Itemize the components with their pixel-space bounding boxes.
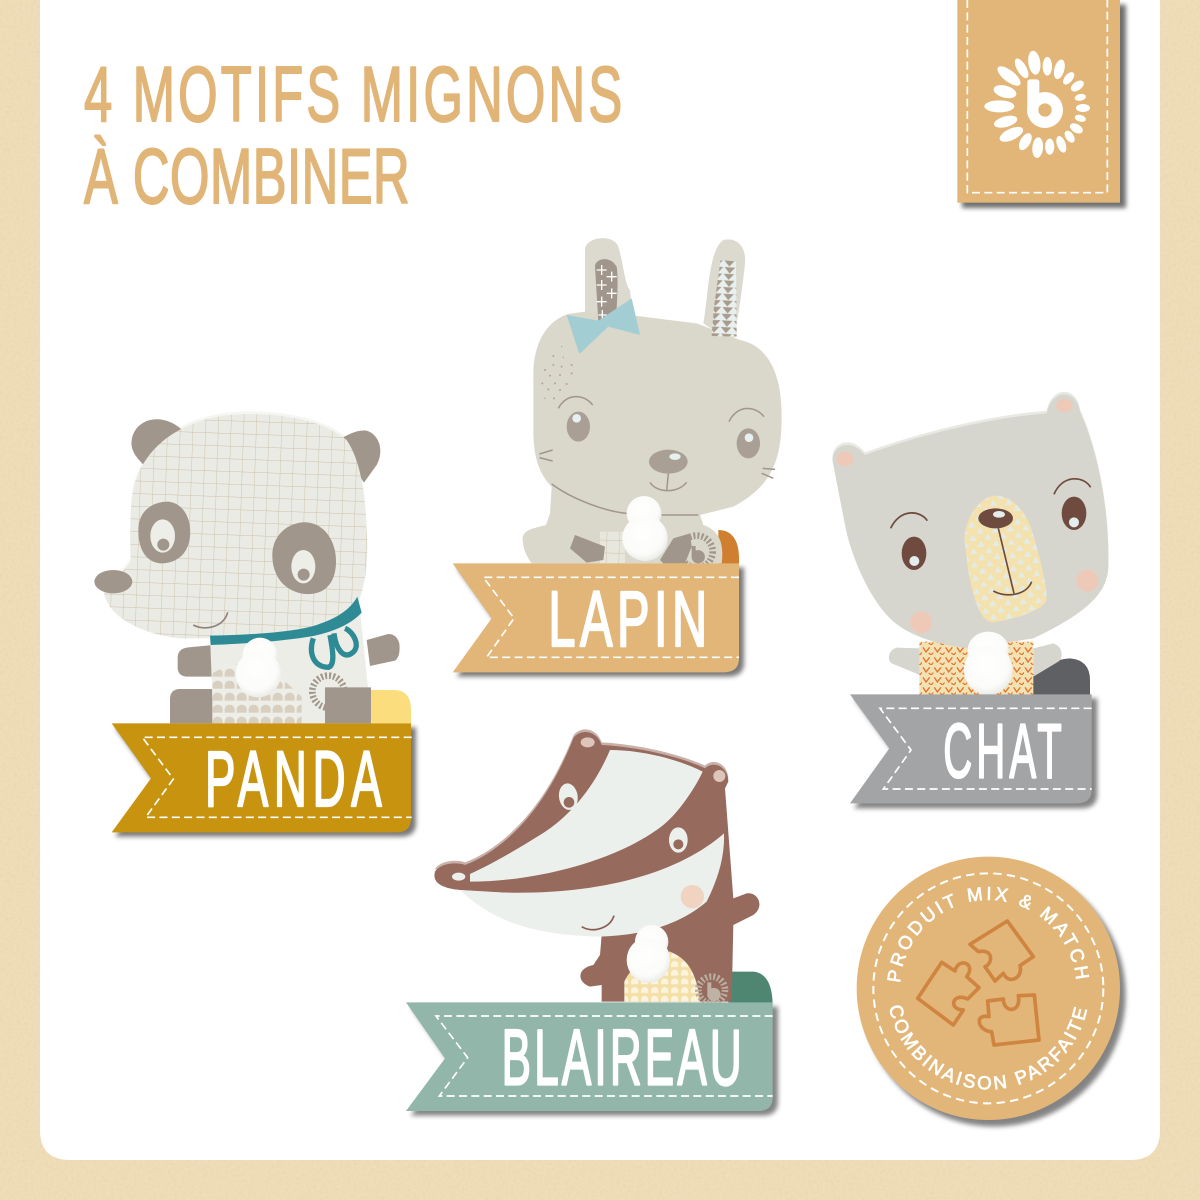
head edge — [833, 392, 1108, 566]
icon: brand logo — [984, 50, 1090, 158]
banner label: BLAIREAU — [502, 1013, 742, 1102]
arms — [889, 648, 920, 675]
scarf — [210, 597, 362, 667]
eyes — [94, 502, 336, 594]
peg — [622, 496, 668, 561]
peg — [236, 638, 281, 697]
white stripes — [460, 833, 724, 937]
head edge — [435, 729, 728, 882]
badge top text: PRODUIT MIX & MATCH — [887, 886, 1090, 982]
peg — [964, 632, 1013, 695]
ribbon fold — [718, 530, 739, 565]
banner shadow — [115, 727, 416, 837]
ribbon fold — [370, 690, 411, 723]
body and head — [434, 732, 759, 1002]
muzzle — [964, 496, 1047, 622]
paw patches — [570, 535, 605, 563]
freckles — [541, 346, 573, 399]
small sunburst logo — [312, 676, 344, 708]
banner — [453, 563, 739, 672]
head — [104, 414, 367, 638]
banner shadow — [854, 698, 1097, 808]
title: À COMBINER — [84, 132, 410, 220]
banner — [112, 723, 411, 832]
panel: blaireau — [406, 729, 778, 1116]
title: 4 MOTIFS MIGNONS — [84, 50, 622, 138]
panel: chat — [833, 392, 1108, 808]
ear patterns — [595, 259, 618, 322]
head edge — [104, 411, 367, 636]
ear inners — [581, 737, 595, 747]
banner — [406, 1002, 773, 1111]
arms and legs — [170, 634, 400, 723]
ears — [131, 419, 182, 466]
banner shadow — [411, 1007, 778, 1116]
eyes and nose — [557, 782, 579, 811]
belly — [624, 952, 700, 1002]
small sunburst logo — [681, 536, 713, 568]
face — [902, 497, 1086, 570]
head — [833, 394, 1108, 648]
panel: lapin — [453, 238, 782, 677]
title — [84, 50, 622, 220]
small sunburst logo — [698, 977, 725, 1003]
panel: panda — [94, 411, 416, 837]
badge: mix and match — [856, 856, 1129, 1130]
badge bottom text: COMBINAISON PARFAITE — [890, 1005, 1088, 1090]
banner label: LAPIN — [548, 575, 707, 663]
body — [523, 487, 722, 563]
sweater — [919, 642, 1033, 695]
head — [533, 311, 782, 517]
ribbon fold — [1028, 658, 1090, 697]
banner shadow — [457, 567, 744, 677]
brand tag — [957, 0, 1126, 208]
banner label: CHAT — [943, 709, 1062, 794]
bow — [567, 298, 640, 354]
banner — [850, 694, 1092, 803]
face — [539, 397, 775, 515]
grid patch — [600, 532, 625, 563]
banner label: PANDA — [205, 735, 382, 823]
icon: puzzle pieces — [918, 921, 1039, 1045]
peg — [627, 925, 670, 983]
ribbon fold — [728, 972, 773, 1003]
ear inners and cheeks — [837, 399, 1098, 633]
smile — [193, 612, 228, 628]
body — [210, 603, 372, 723]
ears — [585, 238, 633, 313]
